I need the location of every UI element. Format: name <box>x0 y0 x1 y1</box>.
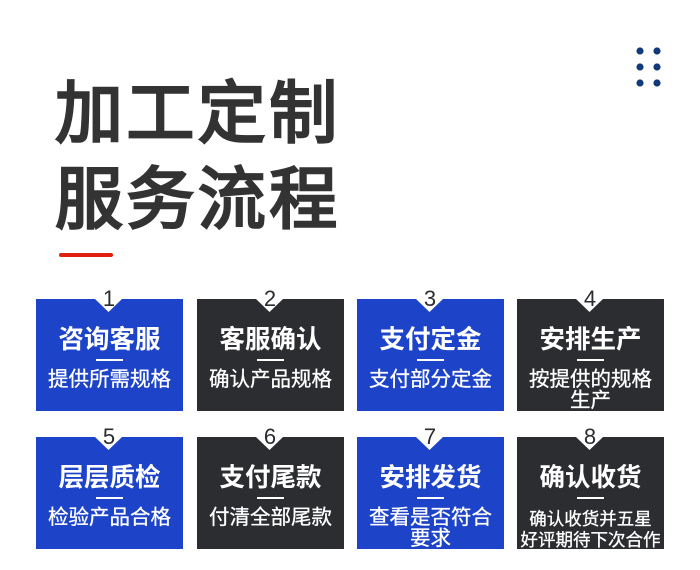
card 7: shipping: 查看是否符合 <box>369 506 492 529</box>
card 2: confirm with service <box>197 299 344 411</box>
title line 2: 服务流程 <box>55 162 341 238</box>
card 1: consult: 提供所需规格 <box>48 368 171 391</box>
title line 1: 加工定制 <box>55 76 341 152</box>
card 4: production <box>517 299 664 411</box>
text: 6 <box>264 424 276 449</box>
card 3: pay deposit <box>357 299 504 411</box>
card 2: confirm with service: 确认产品规格 <box>209 368 332 391</box>
card 4: production: 安排生产 <box>539 326 642 354</box>
text: 4 <box>584 286 596 311</box>
icon: six dots grid <box>636 47 661 87</box>
text: 1 <box>103 286 115 311</box>
card 4: production: 生产 <box>570 388 611 412</box>
card 6: final payment: 支付尾款 <box>219 464 322 492</box>
red accent line <box>59 253 113 257</box>
card 5: quality check <box>36 437 183 549</box>
text: 7 <box>424 424 436 449</box>
card 5: quality check: 检验产品合格 <box>48 506 171 529</box>
card 6: final payment: 付清全部尾款 <box>209 506 332 529</box>
text: 5 <box>103 424 115 449</box>
card 8: confirm receipt: 好评期待下次合作 <box>520 530 660 550</box>
card 7: shipping: 安排发货 <box>379 464 482 492</box>
card 7: shipping <box>357 437 504 549</box>
card 2: confirm with service: 客服确认 <box>219 326 322 354</box>
card 3: pay deposit: 支付部分定金 <box>369 368 492 391</box>
card 3: pay deposit: 支付定金 <box>379 326 482 354</box>
card 6: final payment <box>197 437 344 549</box>
card 4: production: 按提供的规格 <box>529 368 652 391</box>
card 7: shipping: 要求 <box>410 526 451 550</box>
text: 3 <box>424 286 436 311</box>
text: 2 <box>264 286 276 311</box>
text: 8 <box>584 424 596 449</box>
card 5: quality check: 层层质检 <box>58 464 160 492</box>
card 8: confirm receipt: 确认收货并五星 <box>529 508 652 528</box>
card 1: consult <box>36 299 183 411</box>
card 8: confirm receipt: 确认收货 <box>539 464 642 492</box>
card 8: confirm receipt <box>517 437 664 549</box>
card 1: consult: 咨询客服 <box>58 326 160 354</box>
